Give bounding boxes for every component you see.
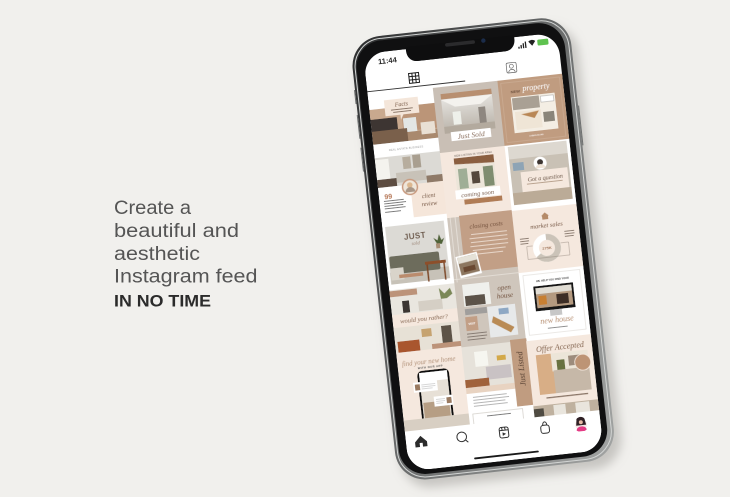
phone mockup bbox=[349, 15, 618, 483]
line: Instagram feed: Instagram feed bbox=[114, 267, 258, 288]
nav background bbox=[404, 410, 605, 472]
icon: shop bbox=[540, 421, 550, 434]
post: just sold bbox=[433, 81, 505, 153]
post: coming soon: NEW LISTING IN YOUR AREA bbox=[454, 151, 493, 158]
monitor bbox=[533, 282, 576, 317]
post: open house: VISIT bbox=[468, 321, 476, 326]
post: offer accepted bbox=[526, 334, 598, 406]
donut chart bbox=[535, 236, 559, 260]
post: market sales: 275K bbox=[542, 245, 552, 251]
post: new house: new house bbox=[540, 313, 575, 326]
phone frame highlight bbox=[352, 18, 614, 480]
post: closing costs bbox=[447, 210, 519, 283]
post: open house: house bbox=[496, 291, 514, 301]
post: new house bbox=[519, 266, 591, 341]
post: just listed: Just Listed bbox=[515, 350, 528, 386]
icon: search bbox=[456, 431, 468, 443]
post: just sold sofa: JUST bbox=[403, 231, 426, 242]
tab icon: grid bbox=[409, 72, 420, 83]
post: got a question: Got a question bbox=[527, 174, 563, 184]
post: client review: 99 bbox=[384, 194, 393, 201]
post: coming soon bbox=[440, 146, 512, 218]
tab icon: tagged bbox=[506, 62, 517, 73]
post: new property bbox=[497, 74, 570, 146]
line: Create a: Create a bbox=[114, 198, 191, 219]
post: market sales: market sales bbox=[530, 220, 564, 231]
line: IN NO TIME: IN NO TIME bbox=[114, 293, 211, 311]
status bar time: 11:44 bbox=[378, 55, 398, 66]
phone shadow bbox=[355, 23, 624, 490]
post: client review bbox=[374, 151, 447, 222]
battery icon bbox=[537, 38, 549, 46]
post: just sold sofa bbox=[382, 218, 454, 290]
post: new property: NEW bbox=[510, 88, 520, 94]
post: open house: open bbox=[497, 283, 512, 293]
post: offer accepted: Offer Accepted bbox=[536, 340, 585, 354]
post: find your new home: find your new home bbox=[402, 356, 456, 368]
phone metal frame bbox=[349, 15, 617, 483]
post: find your new home bbox=[396, 348, 469, 421]
post: new property: property bbox=[521, 81, 550, 93]
post: open house bbox=[454, 276, 527, 348]
signal icon bbox=[518, 41, 527, 49]
icon: reels bbox=[499, 427, 509, 438]
post row peek: right bbox=[533, 399, 600, 418]
feed grid bbox=[367, 74, 600, 435]
notch shape bbox=[406, 35, 516, 62]
front camera bbox=[481, 38, 486, 43]
post: five facts: REAL ESTATE BUSINESS bbox=[389, 145, 424, 152]
post: got a question bbox=[505, 139, 577, 211]
notch bbox=[406, 35, 516, 62]
avatar: client bbox=[402, 178, 418, 196]
post: closing costs: closing costs bbox=[469, 220, 504, 231]
app phone bbox=[417, 368, 454, 419]
post: coming soon: coming soon bbox=[461, 189, 494, 199]
icon: home bbox=[414, 435, 428, 447]
post: five facts bbox=[368, 95, 438, 158]
headline text block bbox=[114, 198, 258, 311]
active tab underline bbox=[367, 81, 465, 92]
profile avatar bbox=[576, 416, 587, 432]
post: just listed bbox=[461, 338, 534, 413]
post: would you rather bbox=[389, 283, 461, 356]
screen background bbox=[362, 31, 605, 472]
post: find your new home: WITH OUR APP bbox=[418, 364, 443, 370]
post: just sold: Just Sold bbox=[457, 129, 485, 141]
bottom navigation bar bbox=[404, 410, 605, 472]
post: five facts: Facts bbox=[393, 101, 409, 109]
icon: house bbox=[541, 212, 549, 220]
speaker bbox=[445, 40, 475, 47]
post row peek: left bbox=[404, 414, 470, 432]
home indicator bar bbox=[474, 451, 539, 459]
avatar: realtor bbox=[534, 156, 547, 170]
post: would you rather: would you rather? bbox=[400, 313, 449, 325]
post: market sales bbox=[512, 204, 584, 276]
post: client review: review bbox=[421, 201, 438, 208]
post: just sold sofa: sold bbox=[411, 241, 421, 247]
post row peek: middle bbox=[472, 408, 534, 424]
small photo bbox=[455, 252, 482, 278]
wifi icon bbox=[528, 39, 536, 46]
line: aesthetic: aesthetic bbox=[114, 244, 200, 265]
post: client review: client bbox=[422, 193, 436, 200]
side buttons bbox=[355, 66, 583, 172]
post: new property: LEARN MORE bbox=[529, 133, 544, 138]
phone screen bbox=[362, 31, 605, 472]
phone bezel bbox=[354, 20, 610, 477]
post: new house: WE HELP YOU FIND YOUR bbox=[536, 276, 569, 283]
line: beautiful and: beautiful and bbox=[114, 221, 239, 242]
